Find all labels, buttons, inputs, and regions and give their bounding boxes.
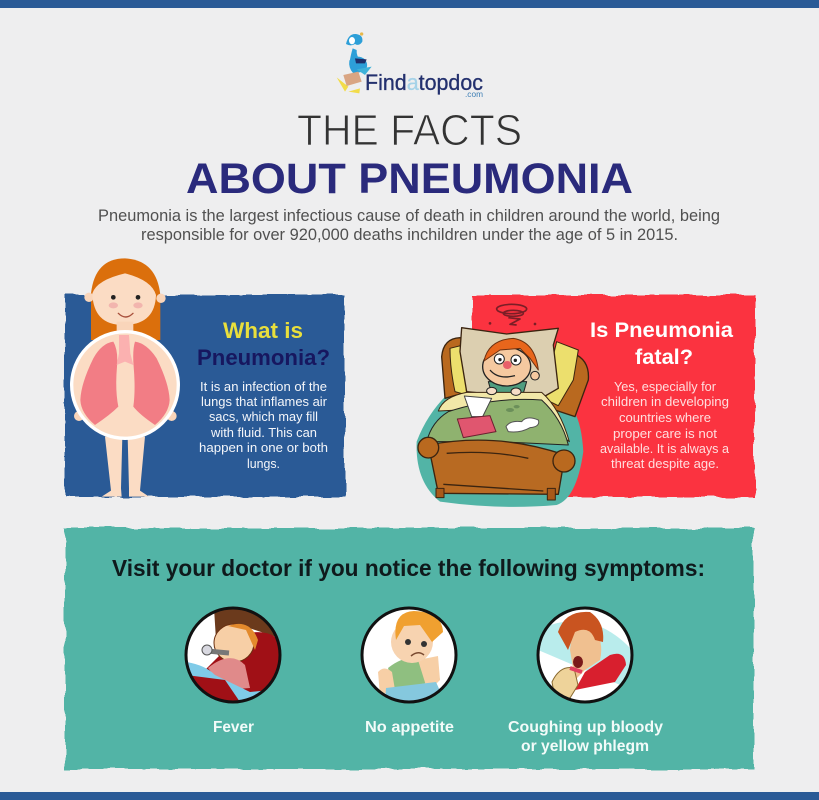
body text: available. It is always a (600, 441, 730, 456)
top bar (0, 0, 819, 8)
label: coughing up bloody or yellow phlegm (508, 719, 663, 755)
heading: is pneumonia: Is Pneumonia (590, 319, 733, 342)
icon: duck mascot (337, 32, 372, 93)
logo (337, 32, 483, 99)
label: coughing up bloody or yellow phlegm: Coughing up bloody (508, 719, 663, 736)
panel: is pneumonia fatal (417, 295, 755, 507)
heading: what is: What is (223, 318, 303, 343)
body text: countries where (619, 410, 711, 425)
label: fever: Fever (213, 719, 254, 736)
body text: threat despite age. (611, 456, 719, 471)
wordmark: Findatopdoc (365, 70, 483, 95)
panel: symptoms (65, 528, 754, 769)
body text: lungs that inflames air (201, 394, 328, 409)
body text: sacs, which may fill (209, 409, 318, 424)
title: about pneumonia: ABOUT PNEUMONIA (186, 155, 633, 203)
body text: It is an infection of the (200, 379, 327, 394)
body text: Yes, especially for (614, 379, 717, 394)
body text: happen in one or both (199, 440, 328, 455)
intro text: responsible for over 920,000 deaths inchildren under the age of 5 in 2015. (141, 225, 678, 244)
body text (600, 379, 730, 471)
body text: with fluid. This can (210, 425, 317, 440)
heading: pneumonia: Pneumonia? (197, 345, 330, 370)
illustration: girl with lungs (72, 258, 178, 497)
intro text: Pneumonia is the largest infectious cause of death in children around the world, being (98, 206, 720, 225)
illustration: sick boy in bed (417, 304, 588, 507)
body text: proper care is not (613, 426, 717, 441)
panel background (65, 295, 345, 497)
panel background (65, 528, 754, 769)
.com: .com (465, 90, 483, 99)
panel background (473, 295, 755, 497)
label: coughing up bloody or yellow phlegm: or yellow phlegm (521, 738, 649, 755)
icon: fever (186, 608, 285, 702)
label: no appetite: No appetite (365, 719, 454, 736)
body text: lungs. (247, 456, 280, 471)
icon: no appetite (362, 608, 456, 702)
bottom bar (0, 792, 819, 800)
icon: coughing (538, 608, 632, 702)
heading: fatal: fatal? (635, 346, 693, 369)
body text (199, 379, 328, 471)
title: the facts: THE FACTS (297, 106, 522, 155)
symptoms heading: Visit your doctor if you notice the following symptoms: (112, 555, 705, 581)
panel: what is pneumonia (65, 258, 345, 497)
body text: children in developing (601, 394, 729, 409)
intro text (98, 206, 720, 244)
